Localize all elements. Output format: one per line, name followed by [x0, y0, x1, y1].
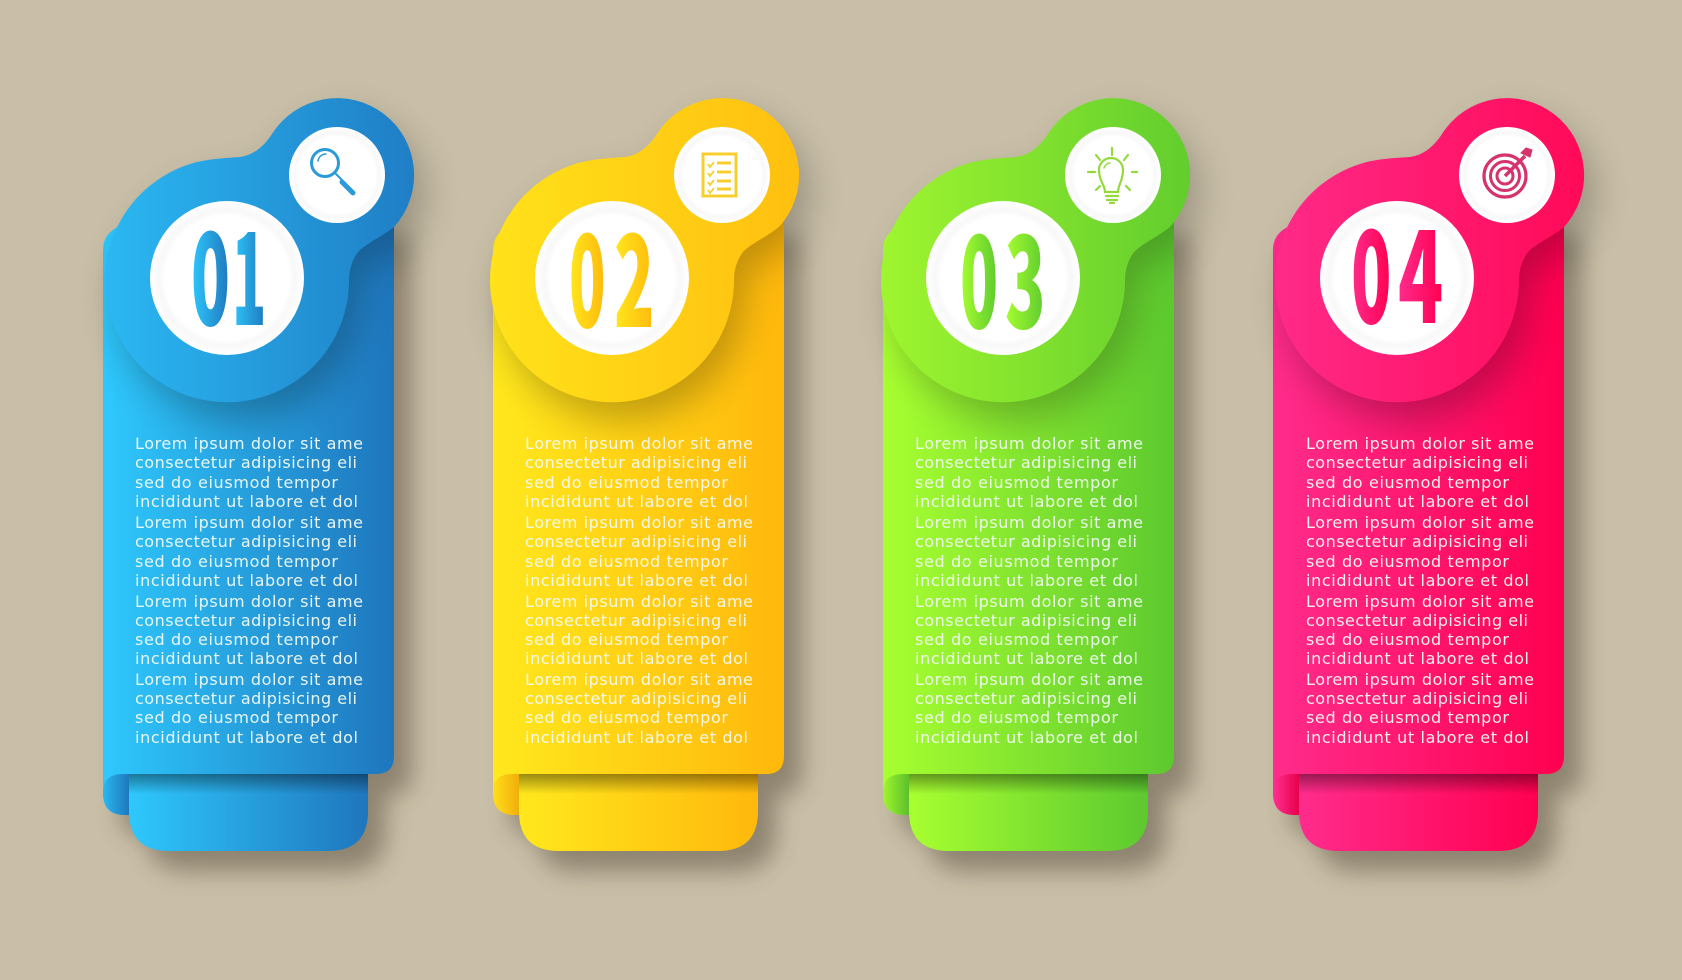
body text: Lorem ipsum dolor sit ame [1306, 592, 1534, 611]
header blob [1275, 98, 1584, 402]
icon: checklist [703, 154, 736, 196]
body text: consectetur adipisicing eli [915, 611, 1137, 630]
body text: incididunt ut labore et dol [135, 728, 358, 747]
body text: incididunt ut labore et dol [1306, 728, 1529, 747]
small icon circle [1459, 127, 1555, 223]
body text: incididunt ut labore et dol [915, 492, 1138, 511]
icon: light bulb [1088, 148, 1137, 203]
body text: consectetur adipisicing eli [1306, 611, 1528, 630]
bottom tab [909, 774, 1148, 851]
number 04 [1351, 176, 1443, 361]
body text: consectetur adipisicing eli [135, 611, 357, 630]
body text: consectetur adipisicing eli [135, 453, 357, 472]
body text: Lorem ipsum dolor sit ame [135, 592, 363, 611]
small icon circle [1065, 127, 1161, 223]
number 03: 3 [1005, 181, 1046, 366]
body text: sed do eiusmod tempor [525, 552, 728, 571]
number circle [150, 201, 304, 355]
body text: consectetur adipisicing eli [1306, 453, 1528, 472]
body text: Lorem ipsum dolor sit ame [525, 670, 753, 689]
body text: sed do eiusmod tempor [915, 552, 1118, 571]
body text: sed do eiusmod tempor [915, 473, 1118, 492]
main card [883, 215, 1174, 774]
number circle [535, 201, 689, 355]
body text: sed do eiusmod tempor [1306, 708, 1509, 727]
body text: Lorem ipsum dolor sit ame [915, 670, 1143, 689]
body text: incididunt ut labore et dol [525, 492, 748, 511]
number 04: 4 [1398, 176, 1443, 361]
body text [135, 434, 363, 747]
body text: incididunt ut labore et dol [525, 649, 748, 668]
header blob shadow [115, 116, 424, 420]
body text: sed do eiusmod tempor [525, 473, 728, 492]
body text: Lorem ipsum dolor sit ame [1306, 670, 1534, 689]
body text: Lorem ipsum dolor sit ame [525, 592, 753, 611]
number circle [926, 201, 1080, 355]
body text: incididunt ut labore et dol [915, 728, 1138, 747]
body text: sed do eiusmod tempor [1306, 473, 1509, 492]
number 01 [191, 177, 266, 363]
body text: consectetur adipisicing eli [915, 689, 1137, 708]
body text: sed do eiusmod tempor [135, 473, 338, 492]
header blob shadow [500, 116, 809, 420]
body text: consectetur adipisicing eli [525, 532, 747, 551]
panel: step 03 green [881, 98, 1200, 871]
main card [103, 215, 394, 774]
base ribbon shadow [121, 235, 412, 871]
panel: step 01 blue [103, 98, 424, 871]
body text: sed do eiusmod tempor [135, 630, 338, 649]
number circle [1320, 201, 1474, 355]
header blob shadow [891, 116, 1200, 420]
body text: incididunt ut labore et dol [1306, 571, 1529, 590]
number 02: 0 [569, 179, 606, 364]
body text: consectetur adipisicing eli [1306, 532, 1528, 551]
body text: consectetur adipisicing eli [525, 453, 747, 472]
body text: consectetur adipisicing eli [525, 611, 747, 630]
folded corner [493, 774, 519, 815]
body text [525, 434, 753, 747]
body text: incididunt ut labore et dol [525, 571, 748, 590]
body text: Lorem ipsum dolor sit ame [1306, 434, 1534, 453]
main card [1273, 215, 1564, 774]
main card [493, 215, 784, 774]
body text: sed do eiusmod tempor [915, 708, 1118, 727]
body text: Lorem ipsum dolor sit ame [915, 434, 1143, 453]
body text: Lorem ipsum dolor sit ame [135, 670, 363, 689]
number 01: 0 [191, 178, 230, 363]
folded corner [103, 774, 129, 815]
body text: sed do eiusmod tempor [1306, 630, 1509, 649]
header blob shadow [1285, 116, 1594, 420]
bottom tab [519, 774, 758, 851]
body text: consectetur adipisicing eli [1306, 689, 1528, 708]
body text: consectetur adipisicing eli [135, 689, 357, 708]
body text: sed do eiusmod tempor [135, 708, 338, 727]
header blob [881, 98, 1190, 402]
body text: incididunt ut labore et dol [135, 492, 358, 511]
body text: Lorem ipsum dolor sit ame [915, 513, 1143, 532]
number 03: 0 [960, 181, 998, 366]
panel: step 02 yellow [490, 98, 809, 871]
body text: Lorem ipsum dolor sit ame [135, 513, 363, 532]
small icon circle [674, 127, 770, 223]
body text: incididunt ut labore et dol [135, 571, 358, 590]
number 02: 2 [614, 180, 655, 365]
body text: sed do eiusmod tempor [915, 630, 1118, 649]
folded corner [883, 774, 909, 815]
folded corner [1273, 774, 1299, 815]
panel: step 04 pink [1273, 98, 1594, 871]
body text: incididunt ut labore et dol [1306, 492, 1529, 511]
body text: incididunt ut labore et dol [915, 571, 1138, 590]
bottom tab [129, 774, 368, 851]
small icon circle [289, 127, 385, 223]
number 03 [960, 181, 1046, 366]
body text: incididunt ut labore et dol [1306, 649, 1529, 668]
header blob [105, 98, 414, 402]
body text: incididunt ut labore et dol [915, 649, 1138, 668]
body text: Lorem ipsum dolor sit ame [525, 434, 753, 453]
body text: sed do eiusmod tempor [1306, 552, 1509, 571]
icon: target [1484, 148, 1532, 197]
body text: Lorem ipsum dolor sit ame [525, 513, 753, 532]
body text: sed do eiusmod tempor [525, 708, 728, 727]
icon: magnifier [312, 150, 353, 193]
body text: consectetur adipisicing eli [135, 532, 357, 551]
body text: consectetur adipisicing eli [915, 532, 1137, 551]
body text: Lorem ipsum dolor sit ame [135, 434, 363, 453]
body text: incididunt ut labore et dol [525, 728, 748, 747]
body text: Lorem ipsum dolor sit ame [915, 592, 1143, 611]
bottom tab [1299, 774, 1538, 851]
number 01: 1 [232, 177, 266, 363]
body text [915, 434, 1143, 747]
body text: sed do eiusmod tempor [135, 552, 338, 571]
body text: Lorem ipsum dolor sit ame [1306, 513, 1534, 532]
body text: consectetur adipisicing eli [525, 689, 747, 708]
header blob [490, 98, 799, 402]
number 04: 0 [1351, 176, 1392, 361]
base ribbon shadow [1291, 235, 1582, 871]
number 02 [569, 179, 655, 365]
body text: sed do eiusmod tempor [525, 630, 728, 649]
base ribbon shadow [901, 235, 1192, 871]
body text: consectetur adipisicing eli [915, 453, 1137, 472]
body text: incididunt ut labore et dol [135, 649, 358, 668]
base ribbon shadow [511, 235, 802, 871]
body text [1306, 434, 1534, 747]
